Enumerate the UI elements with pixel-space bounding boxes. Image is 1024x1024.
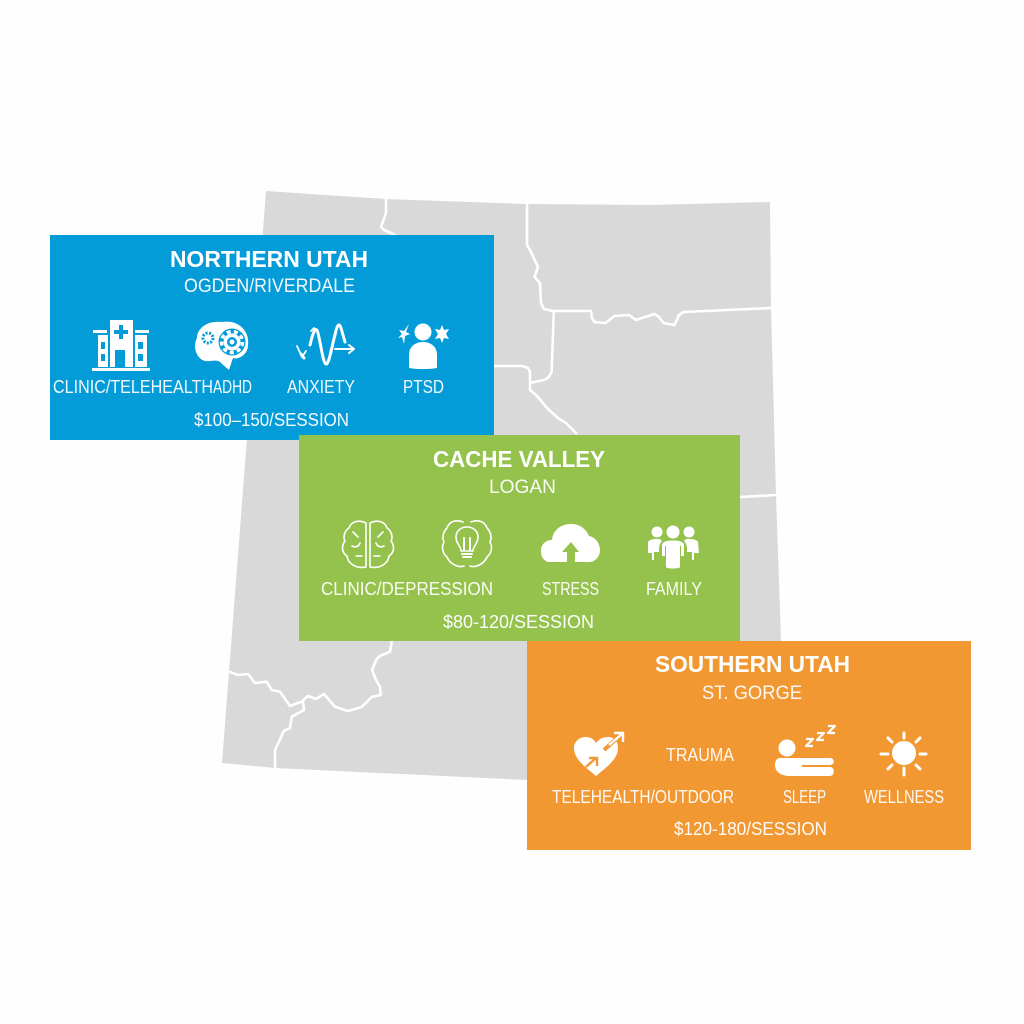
heading: southern utah: SOUTHERN UTAH	[655, 651, 850, 677]
icon: family group	[648, 526, 699, 568]
icon: cloud with up arrow	[541, 524, 600, 562]
price: southern utah: $120-180/SESSION	[674, 819, 827, 839]
map of Utah regions	[222, 191, 781, 780]
icon: brain with gears	[195, 322, 248, 370]
label: clinic/telehealth: CLINIC/TELEHEALTH	[53, 377, 213, 397]
icon: hospital	[92, 320, 150, 371]
icon: heart with arrows	[574, 733, 623, 776]
panel: northern utah	[50, 235, 494, 440]
label: telehealth/outdoor: TELEHEALTH/OUTDOOR	[552, 787, 734, 807]
panel: cache valley	[299, 435, 740, 641]
icon: sleeping person	[775, 726, 835, 776]
subheading: st. gorge: ST. GORGE	[702, 683, 802, 704]
heading: northern utah: NORTHERN UTAH	[170, 246, 368, 272]
label: anxiety: ANXIETY	[287, 377, 355, 397]
subheading: ogden/riverdale: OGDEN/RIVERDALE	[184, 276, 355, 297]
label: stress: STRESS	[542, 579, 599, 599]
icon: brain with lightbulb	[443, 521, 491, 567]
panel: southern utah	[527, 641, 971, 850]
icon: sun	[881, 733, 926, 775]
subheading: logan: LOGAN	[489, 477, 556, 498]
label: trauma: TRAUMA	[666, 745, 734, 765]
label: family: FAMILY	[646, 579, 702, 599]
label: clinic/depression: CLINIC/DEPRESSION	[321, 579, 493, 599]
label: adhd: ADHD	[213, 377, 252, 397]
label: sleep: SLEEP	[783, 787, 826, 807]
icon: person with trauma burst	[398, 324, 449, 369]
icon: brain outline	[343, 521, 393, 567]
price: cache valley: $80-120/SESSION	[443, 612, 594, 632]
price: northern utah: $100–150/SESSION	[194, 410, 349, 430]
icon: anxiety wave	[297, 325, 354, 364]
heading: cache valley: CACHE VALLEY	[433, 446, 605, 472]
label: ptsd: PTSD	[403, 377, 444, 397]
label: wellness: WELLNESS	[864, 787, 944, 807]
